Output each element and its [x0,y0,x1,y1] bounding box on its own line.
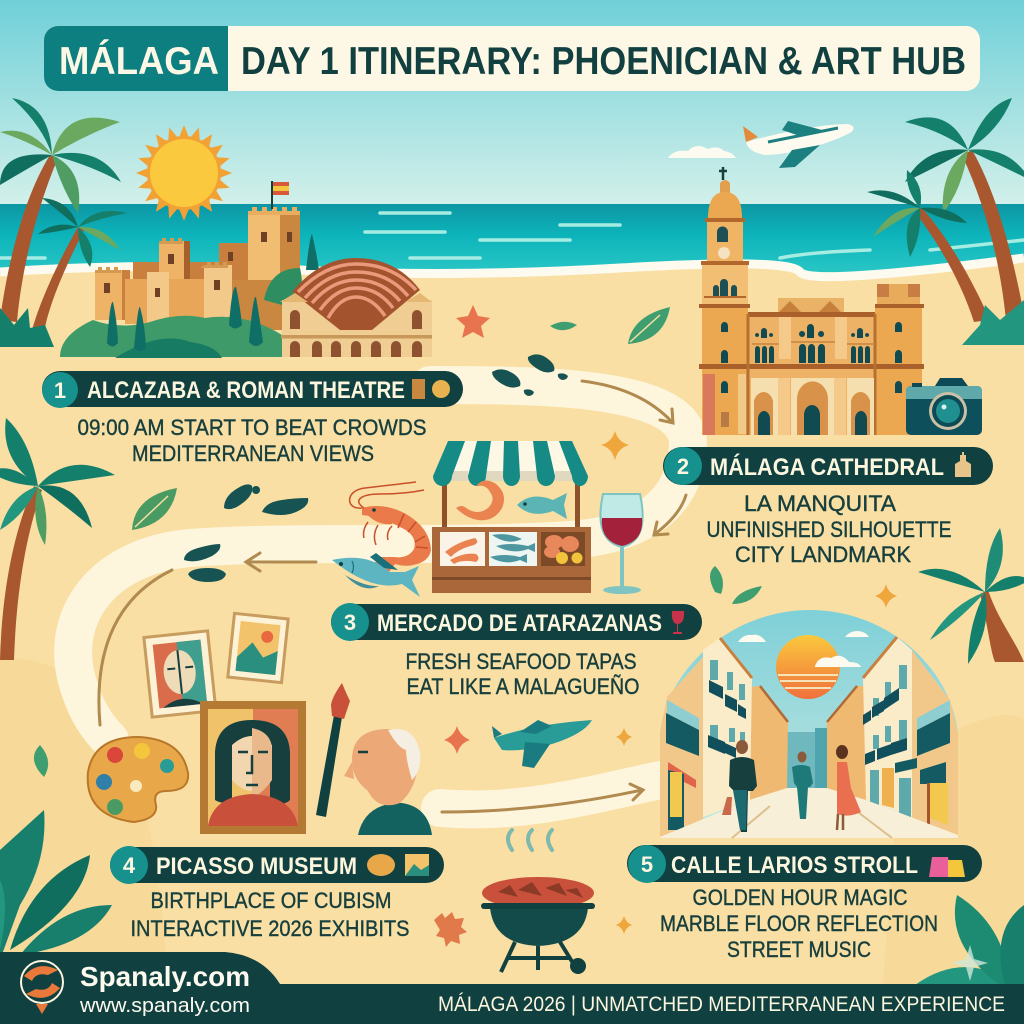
pill: step 2 heading: 2 [677,454,689,479]
text: step 3 details: EAT LIKE A MALAGUEÑO [406,674,640,699]
pill: step 3 heading: MERCADO DE ATARAZANAS [377,610,662,637]
pill: step 4 heading [110,846,444,884]
text: step 2 details: LA MANQUITA [744,491,896,516]
icon: paint palette [88,737,188,822]
pill: step 2 heading [663,447,993,485]
palm tree: top right [867,98,1024,345]
pill: step 5 heading: 5 [641,852,653,877]
text: step 5 details: GOLDEN HOUR MAGIC [692,885,908,910]
footer bar [0,952,1024,1024]
palm tree: mid left [0,418,115,660]
text: step 2 details [706,491,952,567]
icon: leaf [132,488,177,530]
background: sand [0,258,1024,1024]
foliage: bottom left [0,810,112,960]
footprints near start [492,354,568,396]
brand logo [21,961,63,1014]
background: sky [0,0,1024,206]
foliage: bottom right [915,895,1024,985]
decor: starfish and leaves [456,305,670,344]
Cubist art frames [144,613,288,717]
footprints: left [184,544,226,582]
pill: step 5 heading [627,845,982,883]
icon: autumn leaf [434,912,467,947]
palm tree: mid right [918,528,1024,664]
winding walking path [73,385,688,809]
text: step 2 details: UNFINISHED SILHOUETTE [706,517,952,542]
sparkle [601,431,629,460]
arrow: stop 2 to stop 3 [654,495,686,535]
text: step 1 details: MEDITERRANEAN VIEWS [132,441,374,466]
decor: leaves and sparkles [34,566,897,934]
text: step 5 details: MARBLE FLOOR REFLECTION [660,911,938,936]
pill: step 2 heading: MÁLAGA CATHEDRAL [710,453,944,481]
icon: camera [906,378,982,435]
Picasso portrait [344,729,432,835]
illustration: Calle Larios street at sunset [660,610,958,838]
icon: wine glass [600,494,643,594]
text: step 4 details [130,888,410,941]
background: sea [0,204,1024,276]
text: step 1 details: 09:00 AM START TO BEAT CROWDS [78,415,426,440]
arrow: stop 3 to stop 4 [246,553,316,571]
market stall [432,441,591,593]
Cubist portrait in gold frame [200,701,306,834]
text: step 2 details: CITY LANDMARK [735,542,911,567]
arrow: museum to Calle Larios [442,784,643,812]
icon: airplane and cloud [668,121,854,168]
pill: step 5 heading: CALLE LARIOS STROLL [671,852,918,879]
icon: fish [332,553,420,597]
icon: small airplane [492,720,592,768]
footer bar: www.spanaly.com [79,995,250,1017]
title banner [44,26,980,91]
landmark: Málaga Cathedral [699,167,924,435]
pill: step 1 heading: 1 [54,378,66,403]
text: step 1 details [78,415,426,466]
pill: step 3 heading: 3 [344,610,356,635]
palm tree: top left [0,98,127,347]
arrow: stop 1 to stop 2 [582,381,673,423]
icon: barbecue grill [481,830,595,974]
footprints: mid left [224,484,308,515]
text: step 3 details [406,649,640,699]
landmark: Alcazaba fortress [60,181,319,358]
landmark: Roman theatre [280,258,432,357]
icon: sun [136,125,232,221]
pill: step 1 heading: ALCAZABA & ROMAN THEATRE [87,377,405,404]
pill: step 1 heading [42,371,463,408]
pill: step 4 heading: PICASSO MUSEUM [156,853,357,880]
text: step 3 details: FRESH SEAFOOD TAPAS [406,649,636,674]
icon: shrimp [350,482,431,572]
text: step 4 details: BIRTHPLACE OF CUBISM [150,888,392,913]
text: step 5 details [660,885,938,962]
footer bar: Spanaly.com [80,961,250,992]
arrow: curve to museum [99,570,172,725]
pill: step 4 heading: 4 [123,853,136,878]
pill: step 3 heading [331,603,702,641]
text: step 5 details: STREET MUSIC [727,937,871,962]
title banner: MÁLAGA [59,39,219,83]
text: step 4 details: INTERACTIVE 2026 EXHIBITS [130,916,410,941]
icon: paintbrush [316,683,350,817]
